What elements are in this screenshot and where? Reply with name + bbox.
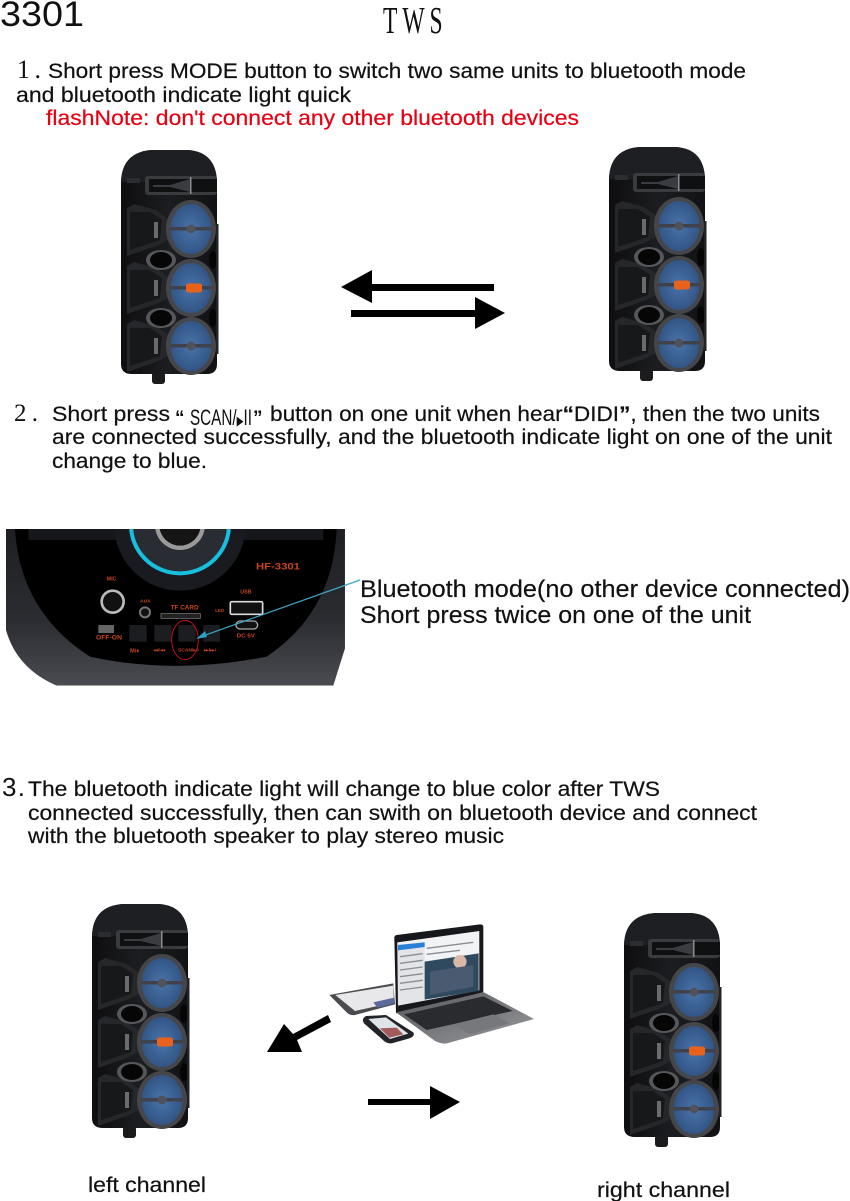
panel: speaker control panel photo: HF-3301: [256, 562, 300, 572]
icon: speaker top left: [121, 150, 218, 384]
callout text: Short press twice on one of the unit: [360, 602, 751, 629]
panel: speaker control panel photo: ▸▸/▸▸I: [203, 648, 216, 653]
callout text: [360, 576, 850, 629]
arrow: diagonal to left speaker: [267, 1015, 331, 1052]
step 2 text block: button on one unit when hear “DIDI”, then the two units: [270, 403, 820, 426]
step 1 text block: Short press MODE button to switch two same units to bluetooth mode: [48, 60, 746, 83]
panel: speaker control panel photo: MIC: [107, 577, 117, 583]
step 3 text block: [2, 772, 757, 848]
step 1 text block: [16, 55, 746, 130]
step 3 text block: 3.: [2, 772, 25, 802]
icon: left channel speaker: [92, 904, 190, 1138]
step 3 text block: with the bluetooth speaker to play stereo music: [27, 825, 504, 848]
arrow: pointing right: [351, 297, 505, 329]
panel: speaker control panel photo: [6, 529, 345, 686]
step 2 text block: Short press: [52, 403, 170, 426]
panel: speaker control panel photo: TF CARD: [171, 606, 199, 612]
step 1 text block: 1.: [17, 55, 41, 84]
panel: speaker control panel photo: ◂◂/I◂◂: [152, 648, 166, 653]
step 2 text block: SCAN/▶II: [190, 405, 252, 430]
step 3 text block: connected successfully, then can swith on bluetooth device and connect: [28, 802, 757, 825]
panel: speaker control panel photo: AUX: [140, 598, 151, 604]
step 1 text block: and bluetooth indicate light quick: [16, 84, 352, 107]
arrow: to right speaker: [368, 1086, 460, 1119]
panel: speaker control panel photo: USB: [240, 590, 252, 596]
panel: speaker control panel photo: M/♦: [130, 648, 139, 654]
panel: speaker control panel photo: SCAN/▸II: [178, 648, 199, 653]
step 2 text block: [14, 400, 832, 473]
step 3 text block: The bluetooth indicate light will change to blue color after TWS: [28, 778, 660, 801]
title: TWS: TWS: [383, 0, 448, 41]
step 2 text block: change to blue.: [52, 450, 207, 473]
step 1 text block: flashNote: don't connect any other bluetooth devices: [46, 107, 579, 130]
step 2 text block: “: [175, 408, 184, 429]
label: left channel: left channel: [88, 1174, 206, 1197]
callout arrow: cyan leader line: [196, 580, 360, 639]
callout text: Bluetooth mode(no other device connected): [360, 576, 850, 603]
panel: speaker control panel photo: LED: [215, 608, 224, 613]
step 2 text block: 2.: [14, 400, 38, 427]
step 2 text block: are connected successfully, and the bluetooth indicate light on one of the unit: [52, 426, 832, 449]
icon: speaker top right: [609, 147, 706, 381]
arrow: pointing left: [341, 270, 494, 303]
step 2 text block: ”: [253, 408, 262, 429]
panel: speaker control panel photo: DC 5V: [237, 633, 255, 639]
panel: speaker control panel photo: OFF-ON: [96, 636, 122, 642]
icon: laptop tablet and phone: [329, 924, 534, 1044]
icon: right channel speaker: [624, 913, 722, 1147]
